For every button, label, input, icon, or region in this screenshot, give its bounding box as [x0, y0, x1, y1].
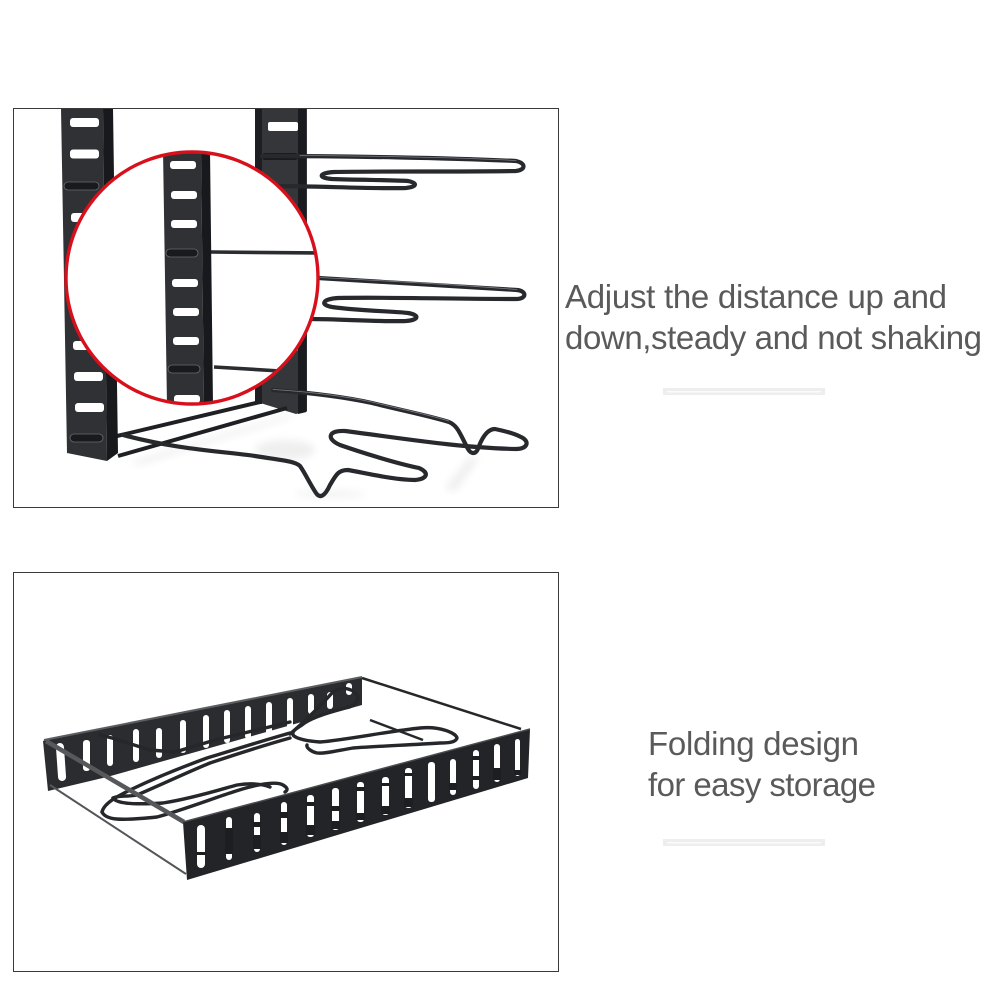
- magnified post: [163, 150, 213, 406]
- divider: lower: [663, 839, 825, 846]
- front-left rod: [46, 741, 184, 822]
- divider: upper: [663, 388, 825, 395]
- right and lower rods: [50, 678, 521, 874]
- folded wires: [102, 688, 457, 819]
- wire behind back slots: [100, 722, 290, 752]
- wire shelf: top: [262, 156, 524, 188]
- left post: [61, 108, 118, 461]
- caption: adjust distance: Adjust the distance up and: [565, 278, 947, 315]
- caption: folding design: Folding design: [648, 725, 859, 762]
- caption: adjust distance: down,steady and not shaking: [565, 319, 982, 356]
- panel: folded rack photo: [14, 572, 558, 972]
- wire shelf: bottom: [123, 390, 527, 496]
- magnified rods: [211, 252, 320, 371]
- magnifier circle: [66, 150, 320, 406]
- floor reflections: [142, 440, 474, 496]
- back rail: [43, 677, 362, 791]
- wire shelf: middle: [310, 278, 524, 321]
- caption: folding design: for easy storage: [648, 766, 876, 803]
- front rail: [183, 729, 530, 880]
- panel: adjustable rack photo: [14, 108, 558, 508]
- caption: folding design: [648, 725, 876, 803]
- base rods: [117, 402, 287, 456]
- right post: [255, 108, 307, 414]
- caption: adjust distance: [565, 278, 982, 356]
